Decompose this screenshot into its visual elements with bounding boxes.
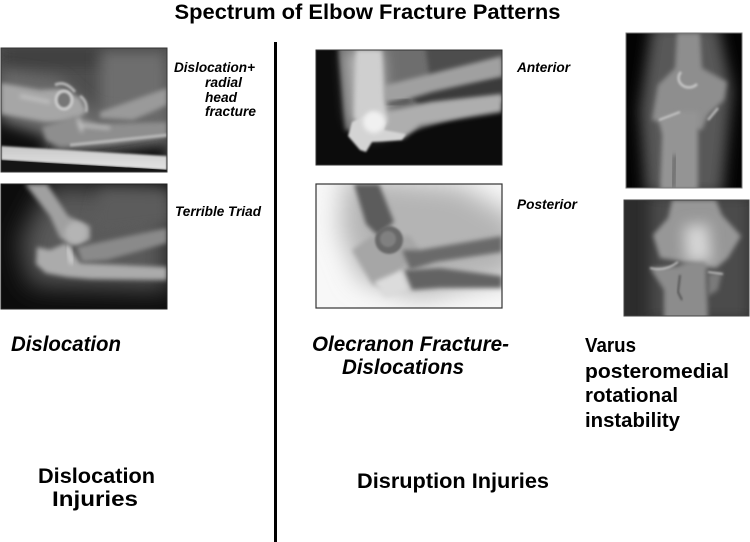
category: dislocation injuries: Injuries bbox=[52, 488, 138, 511]
x-ray: varus oblique view bbox=[624, 195, 750, 320]
label: posterior: Posterior bbox=[517, 196, 579, 212]
label: dislocation plus radial head fracture: Dislocation+ bbox=[174, 59, 255, 75]
label: terrible triad: Terrible Triad bbox=[175, 203, 261, 219]
label: dislocation plus radial head fracture bbox=[174, 59, 256, 119]
heading: olecranon fracture-dislocations: Dislocations bbox=[342, 356, 464, 379]
label: dislocation plus radial head fracture: head bbox=[205, 89, 237, 105]
category: dislocation injuries bbox=[38, 465, 155, 511]
heading: olecranon fracture-dislocations: Olecranon Fracture- bbox=[312, 333, 509, 356]
x-ray: terrible triad bbox=[1, 184, 170, 309]
heading: varus posteromedial rotational instability: posteromedial bbox=[585, 361, 729, 383]
x-ray frame 3 bbox=[316, 50, 502, 165]
heading: varus posteromedial rotational instability: Varus bbox=[585, 335, 636, 357]
category: dislocation injuries: Dislocation bbox=[38, 465, 155, 488]
label: dislocation plus radial head fracture: radial bbox=[205, 74, 243, 90]
heading: dislocation: Dislocation bbox=[11, 333, 121, 356]
category: disruption injuries: Disruption Injuries bbox=[357, 470, 549, 493]
heading: varus posteromedial rotational instability: rotational bbox=[585, 385, 678, 407]
heading: olecranon fracture-dislocations bbox=[312, 333, 509, 379]
label: dislocation plus radial head fracture: fracture bbox=[205, 103, 256, 119]
heading: varus posteromedial rotational instability: instability bbox=[585, 410, 681, 432]
heading: varus posteromedial rotational instability bbox=[585, 335, 729, 432]
x-ray frame 2 bbox=[1, 184, 167, 309]
label: anterior: Anterior bbox=[516, 59, 572, 75]
x-ray: posterior olecranon fracture-dislocation bbox=[317, 184, 502, 308]
x-ray: anterior olecranon fracture-dislocation bbox=[316, 45, 510, 165]
x-ray frame 5 bbox=[626, 33, 742, 188]
x-ray: varus AP view bbox=[626, 34, 742, 188]
x-ray frame 6 bbox=[624, 200, 749, 316]
x-ray frame 4 bbox=[316, 184, 502, 308]
x-ray frame 1 bbox=[1, 48, 167, 172]
x-ray: dislocation with radial head fracture bbox=[0, 48, 170, 180]
title: Spectrum of Elbow Fracture Patterns bbox=[174, 1, 560, 24]
centre vertical divider bbox=[274, 42, 277, 542]
